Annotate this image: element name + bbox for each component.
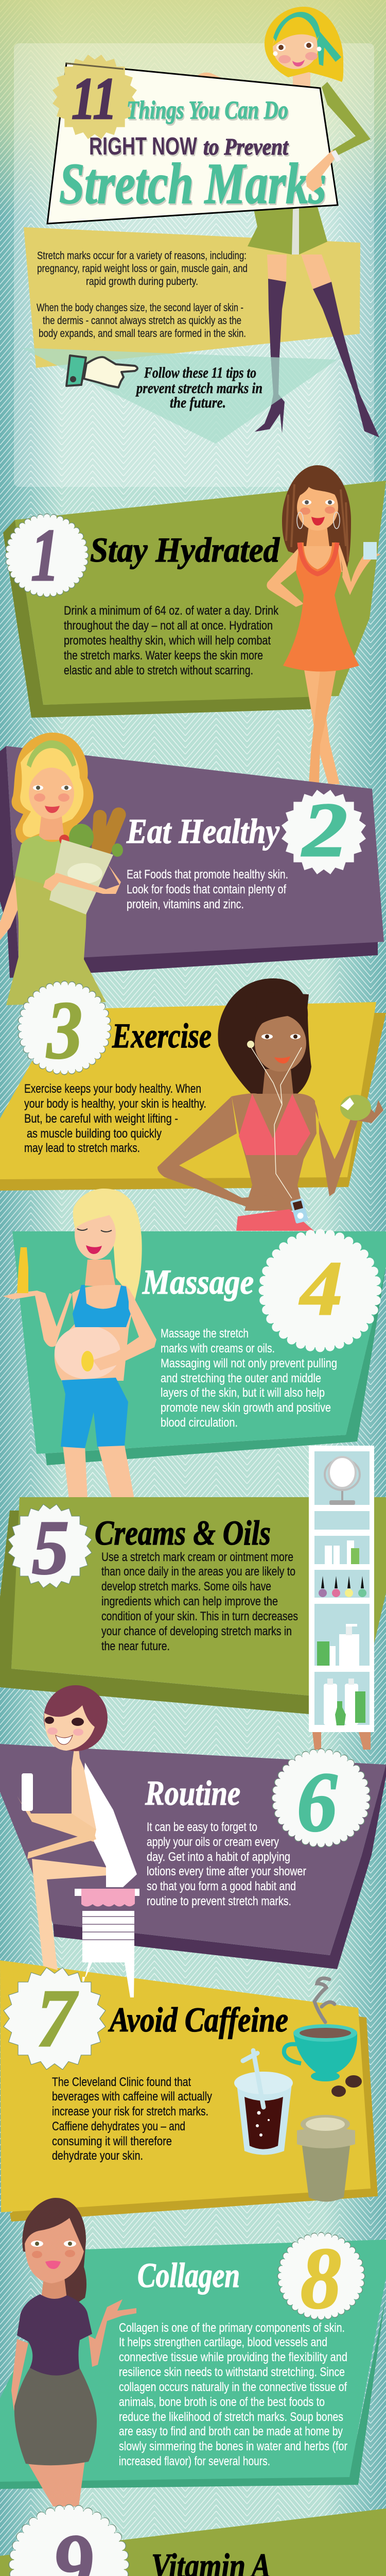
- body text: [147, 1820, 306, 1908]
- badge: 1: [8, 514, 85, 597]
- badge: 5: 5: [32, 1505, 69, 1590]
- badge: 6: 6: [297, 1755, 337, 1849]
- text: intro paragraph: When the body changes size, the second layer of skin -: [37, 302, 243, 314]
- section 8: collagen: [0, 2198, 386, 2506]
- section 5: creams and oils: [0, 1446, 386, 1750]
- badge: 9: [13, 2509, 125, 2576]
- body text: blood circulation.: [161, 1416, 238, 1430]
- section 6: routine: [0, 1685, 386, 1997]
- text: follow these tips: [135, 364, 262, 411]
- section 3: exercise: [0, 978, 386, 1231]
- badge: 11 star: [52, 55, 137, 139]
- body text: increase your risk for stretch marks.: [52, 2105, 208, 2119]
- body text: the stretch marks. Water keeps the skin more: [64, 649, 263, 663]
- text: intro paragraph: Stretch marks occur for a variety of reasons, including:: [37, 250, 247, 262]
- body text: Look for foods that contain plenty of: [127, 883, 286, 896]
- body text: than once daily in the areas you are likely to: [101, 1565, 295, 1579]
- illustration: woman presenting: [11, 2198, 136, 2506]
- illustration: blonde woman with groceries: [0, 733, 128, 1005]
- heading: Avoid Caffeine: [108, 2000, 288, 2039]
- text: intro paragraph: body expands, and small tears are formed in the skin.: [39, 328, 246, 340]
- body text: apply your oils or cream every: [147, 1835, 279, 1849]
- badge: 4: [264, 1234, 377, 1347]
- stool: [75, 1889, 139, 1997]
- badge: 8: 8: [301, 2230, 341, 2327]
- illustration: woman's hand on sign: [306, 150, 341, 192]
- body text: Massage the stretch: [161, 1327, 249, 1341]
- body text: Caffiene dehydrates you – and: [52, 2120, 185, 2133]
- section 1: stay hydrated: [3, 465, 386, 784]
- panel shape: [0, 746, 384, 978]
- section 4: massage: [3, 1189, 386, 1499]
- heading: Creams & Oils: [95, 1513, 271, 1552]
- body text: consuming it will therefore: [52, 2134, 172, 2148]
- body text: marks with creams or oils.: [161, 1342, 275, 1355]
- illustration: bathroom cabinet: [309, 1446, 374, 1750]
- body text: animals, bone broth is one of the best foods to: [119, 2395, 325, 2409]
- icon: mirror: [325, 1457, 360, 1505]
- body text: The Cleveland Clinic found that: [52, 2075, 191, 2089]
- body text: increased flavor) for several hours.: [119, 2454, 270, 2468]
- body text: It can be easy to forget to: [147, 1820, 257, 1834]
- title text: Things You Can Do: [127, 95, 288, 124]
- body text: the near future.: [101, 1639, 170, 1653]
- text: follow these tips: Follow these 11 tips to: [144, 364, 256, 381]
- illustration: pregnant woman with oil: [3, 1189, 156, 1499]
- body text: Drink a minimum of 64 oz. of water a day. Drink: [64, 604, 279, 618]
- text: intro paragraph: [37, 250, 248, 340]
- shape: translucent tip triangle: [21, 348, 337, 444]
- panel shape: [0, 1744, 386, 1969]
- body text: Exercise keeps your body healthy. When: [24, 1082, 201, 1096]
- icon: steaming coffee cup: [284, 1978, 362, 2097]
- panel shape: [12, 1231, 386, 1465]
- title text: [59, 95, 326, 216]
- text: follow these tips: the future.: [170, 394, 226, 411]
- badge: 7: [3, 1967, 106, 2070]
- text: follow these tips: prevent stretch marks in: [135, 380, 262, 397]
- badge: 3: [21, 984, 108, 1076]
- heading: Stay Hydrated: [90, 530, 280, 569]
- section 7: caffeine content: [3, 1967, 362, 2202]
- illustration: woman in towel on stool: [17, 1685, 139, 1997]
- body text: [52, 2075, 212, 2163]
- panel shape: [3, 481, 386, 718]
- body text: But, be careful with weight lifting -: [24, 1112, 178, 1126]
- heading: Routine: [145, 1773, 240, 1812]
- body text: condition of your skin. This in turn decreases: [101, 1609, 298, 1623]
- body text: and stretching the outer and middle: [161, 1371, 321, 1385]
- panel: title area: [14, 7, 379, 487]
- icon: bottles on shelves: [317, 1540, 366, 1725]
- body text: Eat Foods that promote healthy skin.: [127, 868, 288, 882]
- heading: Eat Healthy: [126, 811, 280, 851]
- body text: dehydrate your skin.: [52, 2149, 143, 2163]
- body text: [127, 868, 288, 911]
- title text: RIGHT NOW: [89, 133, 198, 160]
- badge: 11 star: 11: [72, 66, 117, 132]
- badge: 1: 1: [31, 514, 59, 597]
- body text: elastic and able to stretch without scarring.: [64, 664, 253, 677]
- heading: Exercise: [112, 1016, 212, 1055]
- body text: throughout the day – not all at once. Hydration: [64, 619, 273, 633]
- panel shape: [0, 2509, 386, 2576]
- section 2: eat healthy: [0, 733, 384, 1005]
- body text: promotes healthy skin, which will help combat: [64, 634, 271, 648]
- body text: connective tissue while providing the flexibility and: [119, 2350, 347, 2364]
- illustration: brunette with water: [267, 465, 381, 784]
- heading: Collagen: [137, 2256, 240, 2295]
- illustration: blonde woman with sign: [197, 7, 379, 437]
- body text: protein, vitamins and zinc.: [127, 897, 244, 911]
- body text: It helps strengthen cartilage, blood vessels and: [119, 2335, 327, 2349]
- badge: 6: [275, 1752, 367, 1849]
- panel: intro yellow: [24, 227, 360, 368]
- body text: [101, 1550, 298, 1653]
- icon: pointing hand: [66, 355, 137, 387]
- section 7: avoid caffeine panel: [0, 1960, 378, 2222]
- text: intro paragraph: rapid growth during puberty.: [86, 276, 198, 287]
- body text: promote new skin growth and positive: [161, 1401, 331, 1415]
- body text: lotions every time after your shower: [147, 1865, 306, 1878]
- body text: may lead to stretch marks.: [24, 1141, 140, 1155]
- panel: title sign: [47, 55, 338, 224]
- body text: layers of the skin, but it will also help: [161, 1386, 325, 1400]
- body text: Use a stretch mark cream or ointment more: [101, 1550, 293, 1564]
- body text: your body is healthy, your skin is healthy.: [24, 1097, 206, 1111]
- illustration: woman exercising: [157, 978, 383, 1231]
- text: intro paragraph: pregnancy, rapid weight loss or gain, muscle gain, and: [37, 263, 248, 275]
- body text: ingredients which can help improve the: [101, 1595, 278, 1608]
- section 9: vitamin A: [0, 2509, 386, 2576]
- text: intro paragraph: the dermis - cannot always stretch as quickly as the: [43, 315, 241, 327]
- badge: 4: 4: [299, 1246, 342, 1331]
- badge: 2: 2: [302, 787, 347, 873]
- body text: so that you form a good habit and: [147, 1879, 296, 1893]
- badge: 7: 7: [37, 1972, 79, 2064]
- body text: develop stretch marks. Some oils have: [101, 1580, 271, 1594]
- badge: 2: [282, 787, 366, 874]
- panel shape: [0, 1002, 386, 1191]
- body text: routine to prevent stretch marks.: [147, 1894, 291, 1908]
- title text: to Prevent: [203, 133, 289, 160]
- body text: beverages with caffeine will actually: [52, 2090, 212, 2104]
- body text: [119, 2321, 347, 2468]
- icon: iced coffee: [234, 2050, 293, 2155]
- panel shape: [0, 1497, 386, 1714]
- badge: 8: [280, 2230, 362, 2327]
- body text: [24, 1082, 206, 1155]
- icon: to-go cup: [297, 2115, 355, 2202]
- body text: Massaging will not only prevent pulling: [161, 1357, 337, 1370]
- body text: [64, 604, 279, 677]
- body text: your chance of developing stretch marks in: [101, 1624, 292, 1638]
- panel shape: [0, 2240, 386, 2489]
- body text: [161, 1327, 337, 1430]
- body text: day. Get into a habit of applying: [147, 1850, 290, 1864]
- heading: Massage: [142, 1262, 254, 1301]
- badge: 5: [8, 1504, 92, 1590]
- badge: 3: 3: [46, 984, 82, 1076]
- body text: as muscle building too quickly: [27, 1127, 162, 1141]
